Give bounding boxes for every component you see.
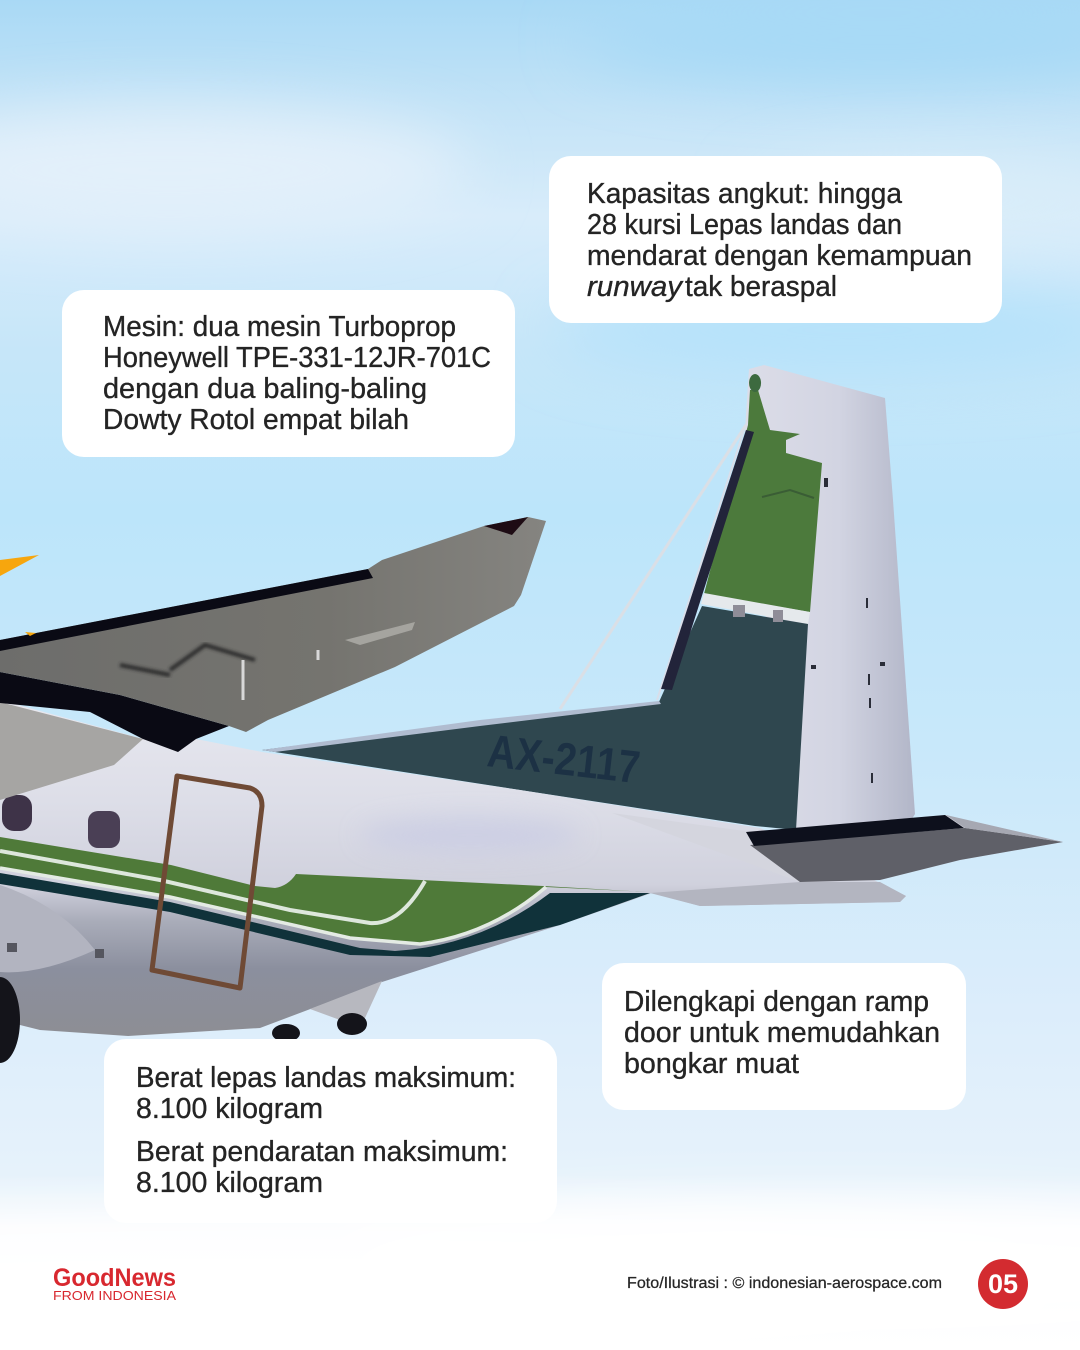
callout: berat: 8.100 kilogram (136, 1167, 323, 1199)
callout: kapasitas angkut: mendarat dengan kemampuan (587, 240, 972, 272)
logo: GoodNews: GoodNews (53, 1264, 176, 1292)
page number: 05 (988, 1269, 1018, 1299)
callout: mesin: Mesin: dua mesin Turboprop (103, 311, 456, 343)
tail details (811, 478, 885, 783)
orange fragments (0, 555, 39, 636)
photo credit: Foto/Ilustrasi : © indonesian-aerospace.com (627, 1275, 942, 1292)
vertical tail fin (262, 365, 915, 832)
antenna wire (560, 425, 746, 709)
side sponson (0, 885, 95, 972)
callout: mesin (62, 290, 515, 457)
fuselage (0, 700, 906, 1036)
callout: kapasitas angkut: runway (587, 271, 684, 303)
airplane (0, 365, 1063, 1063)
wing (0, 517, 546, 732)
callout: mesin: Honeywell TPE-331-12JR-701C (103, 342, 491, 374)
ramp door frame (152, 776, 262, 988)
callout: kapasitas angkut (549, 156, 1002, 323)
callout: kapasitas angkut: 28 kursi Lepas landas dan (587, 209, 902, 241)
registration AX-2117: AX-2117 (485, 724, 643, 793)
callout: berat: Berat lepas landas maksimum: (136, 1062, 516, 1094)
callout: mesin: Dowty Rotol empat bilah (103, 404, 409, 436)
callout: ramp door: Dilengkapi dengan ramp (624, 986, 929, 1018)
callout: berat: Berat pendaratan maksimum: (136, 1136, 508, 1168)
page number (978, 1259, 1028, 1309)
callout: ramp door: bongkar muat (624, 1048, 799, 1080)
horizontal stabiliser (612, 813, 1063, 906)
wing root shadow (0, 672, 229, 752)
callout: ramp door (602, 963, 966, 1110)
small fuselage squares (7, 943, 104, 958)
callout: berat: 8.100 kilogram (136, 1093, 323, 1125)
landing gear (0, 977, 367, 1063)
callout: ramp door: door untuk memudahkan (624, 1017, 940, 1049)
green fuselage stripes (0, 837, 650, 957)
logo: GoodNews: FROM INDONESIA (53, 1288, 176, 1303)
wing root fairing (0, 702, 143, 800)
callout: kapasitas angkut: Kapasitas angkut: hingga (587, 178, 903, 210)
callout: kapasitas angkut: tak beraspal (685, 271, 837, 303)
cabin windows (2, 795, 120, 848)
logo: GoodNews (53, 1264, 176, 1303)
sponson fairing (310, 981, 382, 1020)
callout: mesin: dengan dua baling-baling (103, 373, 427, 405)
belly sheen (360, 817, 580, 853)
callout: berat (104, 1039, 557, 1223)
